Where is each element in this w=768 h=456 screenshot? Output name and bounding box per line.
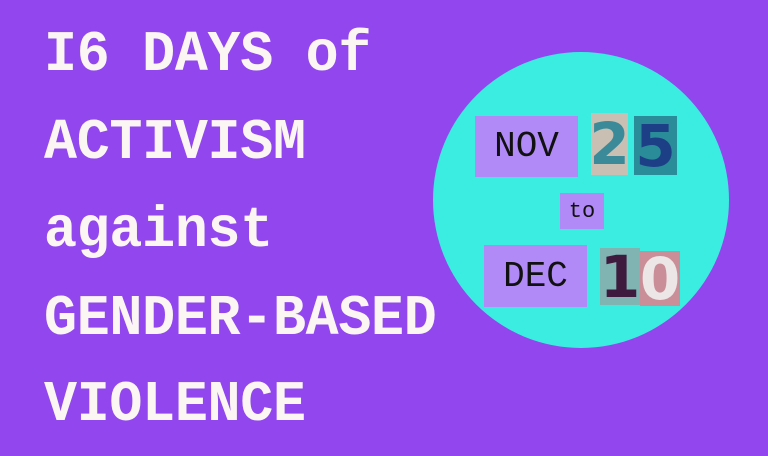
title [44, 22, 436, 438]
DEC label: DEC [503, 256, 568, 296]
NOV label: NOV [494, 126, 559, 167]
DEC label [484, 245, 587, 307]
text: against [44, 198, 273, 264]
text: I6 DAYS of [44, 22, 371, 88]
tile 1: 1 [600, 242, 640, 310]
date circle [433, 52, 729, 348]
text: ACTIVISM [44, 110, 306, 176]
NOV label [475, 116, 578, 177]
text: GENDER-BASED [44, 286, 436, 352]
tile 2: 2 [589, 110, 630, 178]
to label [560, 193, 604, 229]
tile 5: 5 [635, 112, 676, 180]
tile 0: 0 [640, 244, 680, 312]
text: VIOLENCE [44, 372, 306, 438]
to label: to [569, 198, 595, 224]
